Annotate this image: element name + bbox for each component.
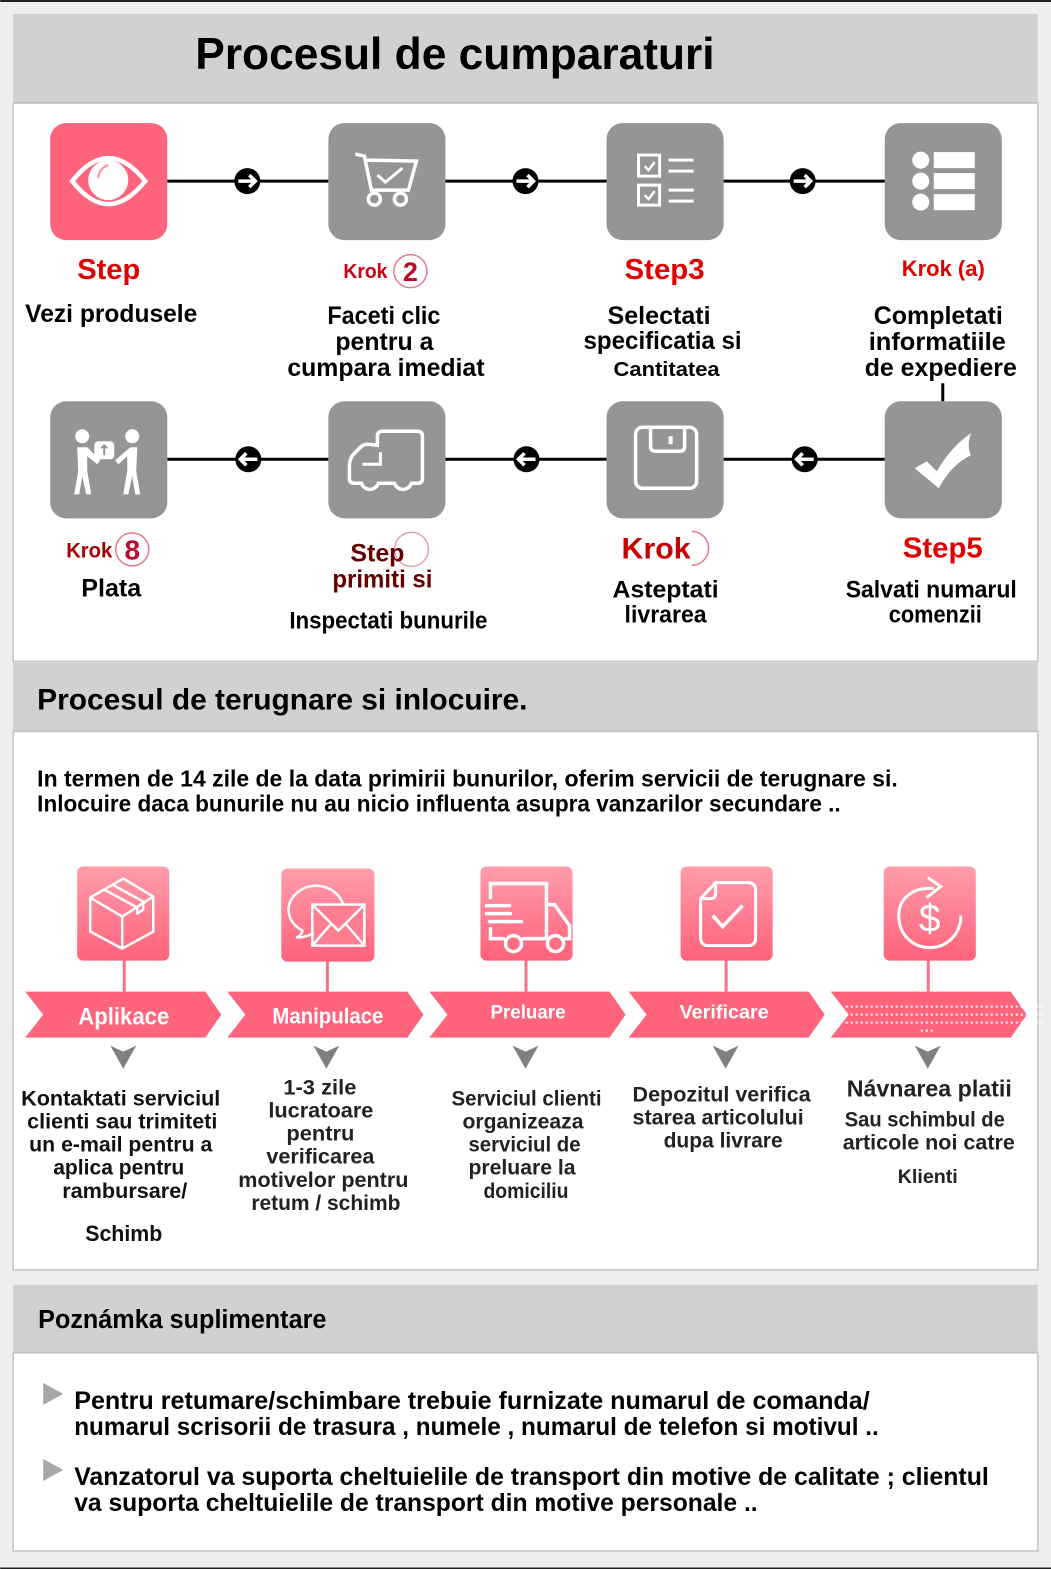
note 2: va suporta cheltuielile de transport din motive personale .. — [74, 1489, 758, 1517]
column 5 text: articole noi catre — [843, 1132, 1015, 1155]
note 2: Vanzatorul va suporta cheltuielile de transport din motive de calitate ; clientul — [74, 1463, 989, 1491]
column 4 text — [633, 1084, 811, 1153]
step 8 text: Krok — [66, 539, 113, 562]
column 2 text: retum / schimb — [251, 1192, 400, 1215]
column 3 text: domiciliu — [483, 1180, 569, 1203]
icon: handover — [50, 401, 167, 518]
connector lines — [167, 181, 943, 459]
icon: document check — [681, 867, 773, 961]
icon: package — [77, 867, 169, 961]
return panel background — [13, 731, 1038, 1270]
chevron: dotted — [831, 992, 1044, 1038]
chevron: Manipulace — [227, 992, 423, 1038]
step 1 text: Step — [77, 254, 140, 286]
chevron: Verificare: Verificare — [680, 1003, 769, 1024]
column 1 text — [21, 1088, 220, 1246]
icon: refund — [884, 867, 976, 961]
section header — [13, 1285, 1038, 1353]
column 4 text: starea articolului — [633, 1107, 804, 1130]
step 4 text — [865, 256, 1017, 382]
intro text: Inlocuire daca bunurile nu au nicio influenta asupra vanzarilor secundare .. — [37, 791, 841, 817]
step 6 text: Asteptati — [613, 576, 719, 603]
arrow: step 1 to 2 — [234, 168, 260, 194]
icon: cart — [328, 123, 445, 240]
column 1 text: clienti sau trimiteti — [27, 1111, 217, 1134]
arrow: step 3 to 4 — [790, 168, 816, 194]
arrow: step 7 to 8 — [235, 446, 261, 472]
step 2 text: pentru a — [335, 328, 435, 356]
step 3 text: Cantitatea — [614, 359, 721, 381]
column 2 text — [238, 1077, 408, 1215]
intro text — [37, 766, 898, 817]
panel: return and exchange process — [13, 662, 1044, 1270]
icon: eye — [50, 123, 167, 240]
step 2 text: 2 — [403, 257, 418, 287]
column 5 text — [843, 1076, 1015, 1188]
icon: floppy disk — [607, 401, 724, 518]
column 2 text: lucratoare — [268, 1100, 373, 1123]
icon: delivery truck — [480, 867, 573, 961]
step 4 text: Krok (a) — [902, 256, 985, 281]
step 3 text: Selectati — [608, 302, 711, 330]
column 3 text: preluare la — [468, 1157, 576, 1180]
column 1 text: Schimb — [85, 1221, 162, 1246]
step 2 text — [287, 255, 485, 382]
panel: additional note — [13, 1285, 1038, 1551]
arrow: step 2 to 3 — [512, 168, 539, 194]
column 4 text: Depozitul verifica — [633, 1084, 811, 1107]
step 7 text — [289, 532, 487, 634]
steps panel background — [13, 103, 1038, 661]
down markers — [110, 1046, 941, 1069]
step 8 text — [66, 533, 149, 602]
arrow: step 6 to 7 — [513, 446, 540, 472]
icon: checklist — [607, 123, 724, 240]
chevron: Preluare — [429, 992, 626, 1038]
step 2 text: cumpara imediat — [287, 354, 485, 382]
panel: purchase process — [13, 14, 1038, 661]
chevron: Aplikace — [25, 992, 221, 1038]
note 1: numarul scrisorii de trasura , numele , numarul de telefon si motivul .. — [74, 1413, 879, 1441]
step 5 text: comenzii — [889, 601, 982, 628]
column 1 text: un e-mail pentru a — [29, 1134, 213, 1157]
step 6 text: livrarea — [625, 601, 707, 628]
step 8 text: Plata — [81, 574, 142, 602]
column 2 text: verificarea — [266, 1146, 375, 1169]
note 1 — [43, 1383, 879, 1441]
step 4 text: de expediere — [865, 354, 1017, 382]
icon: check mark — [885, 401, 1002, 518]
column 1 text: Kontaktati serviciul — [21, 1088, 220, 1111]
column 5 text: Klienti — [898, 1167, 958, 1188]
note 1: Pentru retumare/schimbare trebuie furnizate numarul de comanda/ — [74, 1387, 870, 1415]
chevron: Aplikace: Aplikace — [78, 1004, 169, 1031]
step 1 text: Vezi produsele — [25, 300, 197, 328]
arrow: step 5 to 6 — [792, 446, 818, 472]
chevron: Verificare — [629, 992, 825, 1038]
step 2 text: Faceti clic — [327, 302, 441, 330]
step 8 text: 8 — [124, 534, 140, 565]
icon: chat and mail — [281, 869, 374, 962]
step 5 text: Salvati numarul — [846, 576, 1017, 603]
step 7 text: primiti si — [332, 565, 432, 593]
intro text: In termen de 14 zile de la data primirii bunurilor, oferim servicii de terugnare si. — [37, 766, 898, 792]
step 5 text: Step5 — [903, 532, 983, 564]
chevron: Preluare: Preluare — [490, 1003, 566, 1024]
column 1 text: aplica pentru — [53, 1157, 184, 1180]
column 5 text: Návnarea platii — [847, 1076, 1012, 1102]
column 3 text: Serviciul clienti — [451, 1088, 602, 1111]
step 7 text: Inspectati bunurile — [289, 607, 487, 634]
column 4 text: dupa livrare — [664, 1130, 783, 1153]
column 1 text: rambursare/ — [62, 1180, 187, 1203]
stems — [123, 959, 930, 992]
icon: delivery van — [328, 401, 445, 518]
title: Procesul de cumparaturi — [195, 30, 715, 79]
column 2 text: 1-3 zile — [283, 1077, 356, 1100]
section header — [13, 662, 1038, 732]
column 5 text: Sau schimbul de — [845, 1109, 1005, 1132]
step 5 text — [846, 532, 1017, 628]
step 6 text — [613, 531, 719, 628]
note 2 — [43, 1459, 989, 1517]
column 2 text: pentru — [286, 1123, 354, 1146]
note panel background — [13, 1353, 1038, 1551]
column 2 text: motivelor pentru — [238, 1169, 408, 1192]
step 4 text: informatiile — [869, 328, 1006, 356]
title bar — [13, 14, 1038, 104]
icon: form list — [885, 123, 1002, 240]
column 3 text: serviciul de — [468, 1134, 581, 1157]
step 7 text: Step — [350, 539, 404, 567]
section header: Poznámka suplimentare — [38, 1304, 326, 1334]
step 1 text — [25, 254, 197, 328]
step 3 text: specificatia si — [584, 327, 742, 355]
icon: refund: $ — [919, 898, 941, 941]
chevron: Manipulace: Manipulace — [272, 1004, 383, 1029]
step 4 text: Completati — [874, 302, 1003, 330]
step 3 text: Step3 — [625, 254, 705, 286]
step 2 text: Krok — [343, 261, 388, 283]
step 3 text — [584, 254, 742, 381]
section header: Procesul de terugnare si inlocuire. — [37, 683, 528, 716]
column 3 text: organizeaza — [462, 1111, 584, 1134]
column 3 text — [451, 1088, 602, 1203]
step 6 text: Krok — [622, 532, 691, 565]
